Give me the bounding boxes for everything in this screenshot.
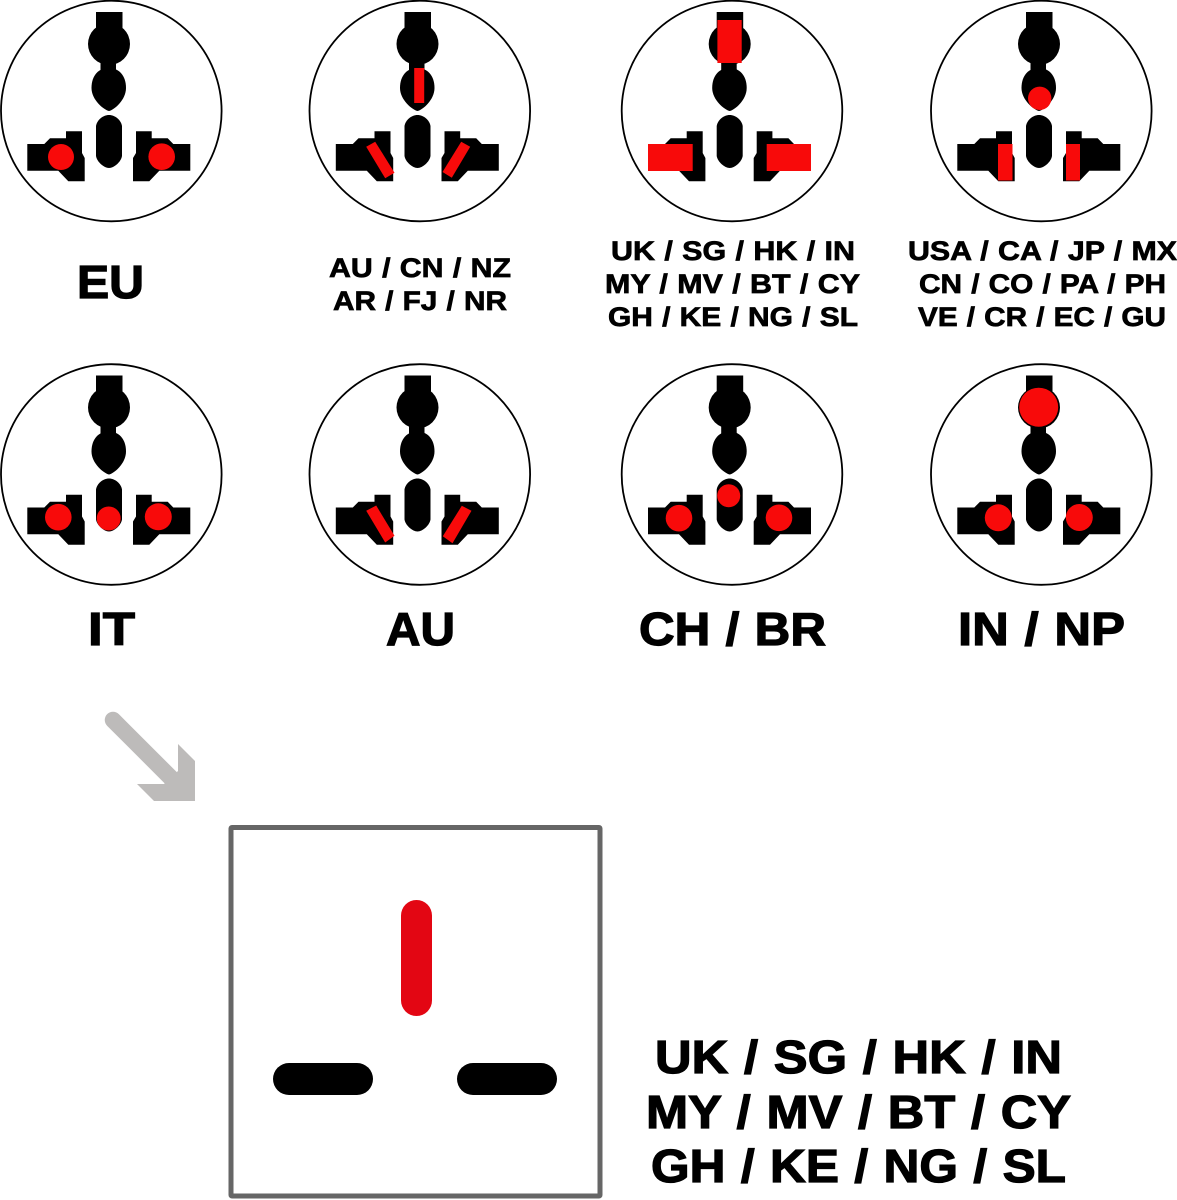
socket: CH / BR bbox=[622, 364, 842, 585]
label: enlarged socket countries: GH / KE / NG / SL bbox=[651, 1140, 1066, 1192]
label: enlarged socket countries: MY / MV / BT / CY bbox=[646, 1086, 1071, 1138]
left pin slot bbox=[273, 1063, 373, 1095]
label: IN / NP: IN / NP bbox=[958, 603, 1125, 655]
socket: IT bbox=[1, 364, 222, 585]
label: USA group: USA / CA / JP / MX bbox=[908, 236, 1177, 266]
label: AU CN NZ AR FJ NR: AR / FJ / NR bbox=[333, 286, 507, 316]
socket: UK / SG / HK bbox=[622, 1, 842, 221]
label: AU CN NZ AR FJ NR: AU / CN / NZ bbox=[329, 253, 511, 283]
label: AU: AU bbox=[386, 603, 455, 655]
socket: AU / CN / NZ bbox=[310, 1, 530, 221]
socket: AU bbox=[310, 364, 530, 585]
label: enlarged socket countries bbox=[646, 1031, 1071, 1192]
label: IT: IT bbox=[88, 603, 135, 655]
socket: IN / NP bbox=[931, 364, 1152, 585]
socket: USA / CA / JP bbox=[931, 1, 1152, 221]
label: CH / BR: CH / BR bbox=[639, 603, 826, 655]
label: USA group bbox=[908, 236, 1177, 332]
socket: EU bbox=[1, 1, 222, 221]
label: UK group bbox=[605, 236, 860, 332]
label: AU CN NZ AR FJ NR bbox=[329, 253, 511, 316]
label: EU: EU bbox=[77, 256, 144, 308]
label: UK group: MY / MV / BT / CY bbox=[605, 269, 860, 299]
arrow bbox=[113, 720, 195, 801]
label: USA group: CN / CO / PA / PH bbox=[919, 269, 1166, 299]
label: USA group: VE / CR / EC / GU bbox=[918, 302, 1166, 332]
label: UK group: GH / KE / NG / SL bbox=[608, 302, 858, 332]
label: UK group: UK / SG / HK / IN bbox=[611, 236, 855, 266]
right pin slot bbox=[457, 1063, 557, 1095]
panel: enlarged UK socket bbox=[231, 828, 600, 1196]
earth pin slot bbox=[401, 900, 432, 1016]
label: enlarged socket countries: UK / SG / HK / IN bbox=[655, 1031, 1062, 1083]
